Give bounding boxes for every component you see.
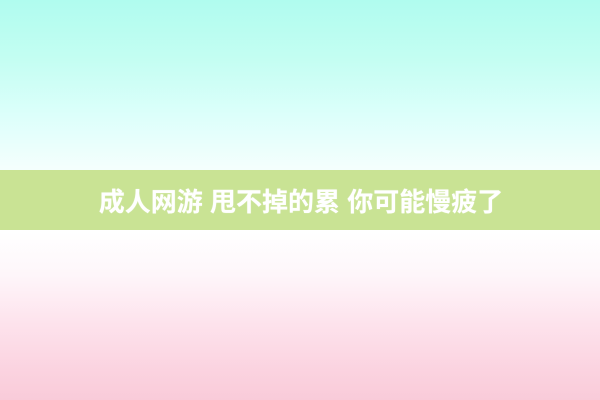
green title band bbox=[0, 170, 600, 230]
title: 成人网游 甩不掉的累 你可能慢疲了 bbox=[99, 187, 503, 217]
